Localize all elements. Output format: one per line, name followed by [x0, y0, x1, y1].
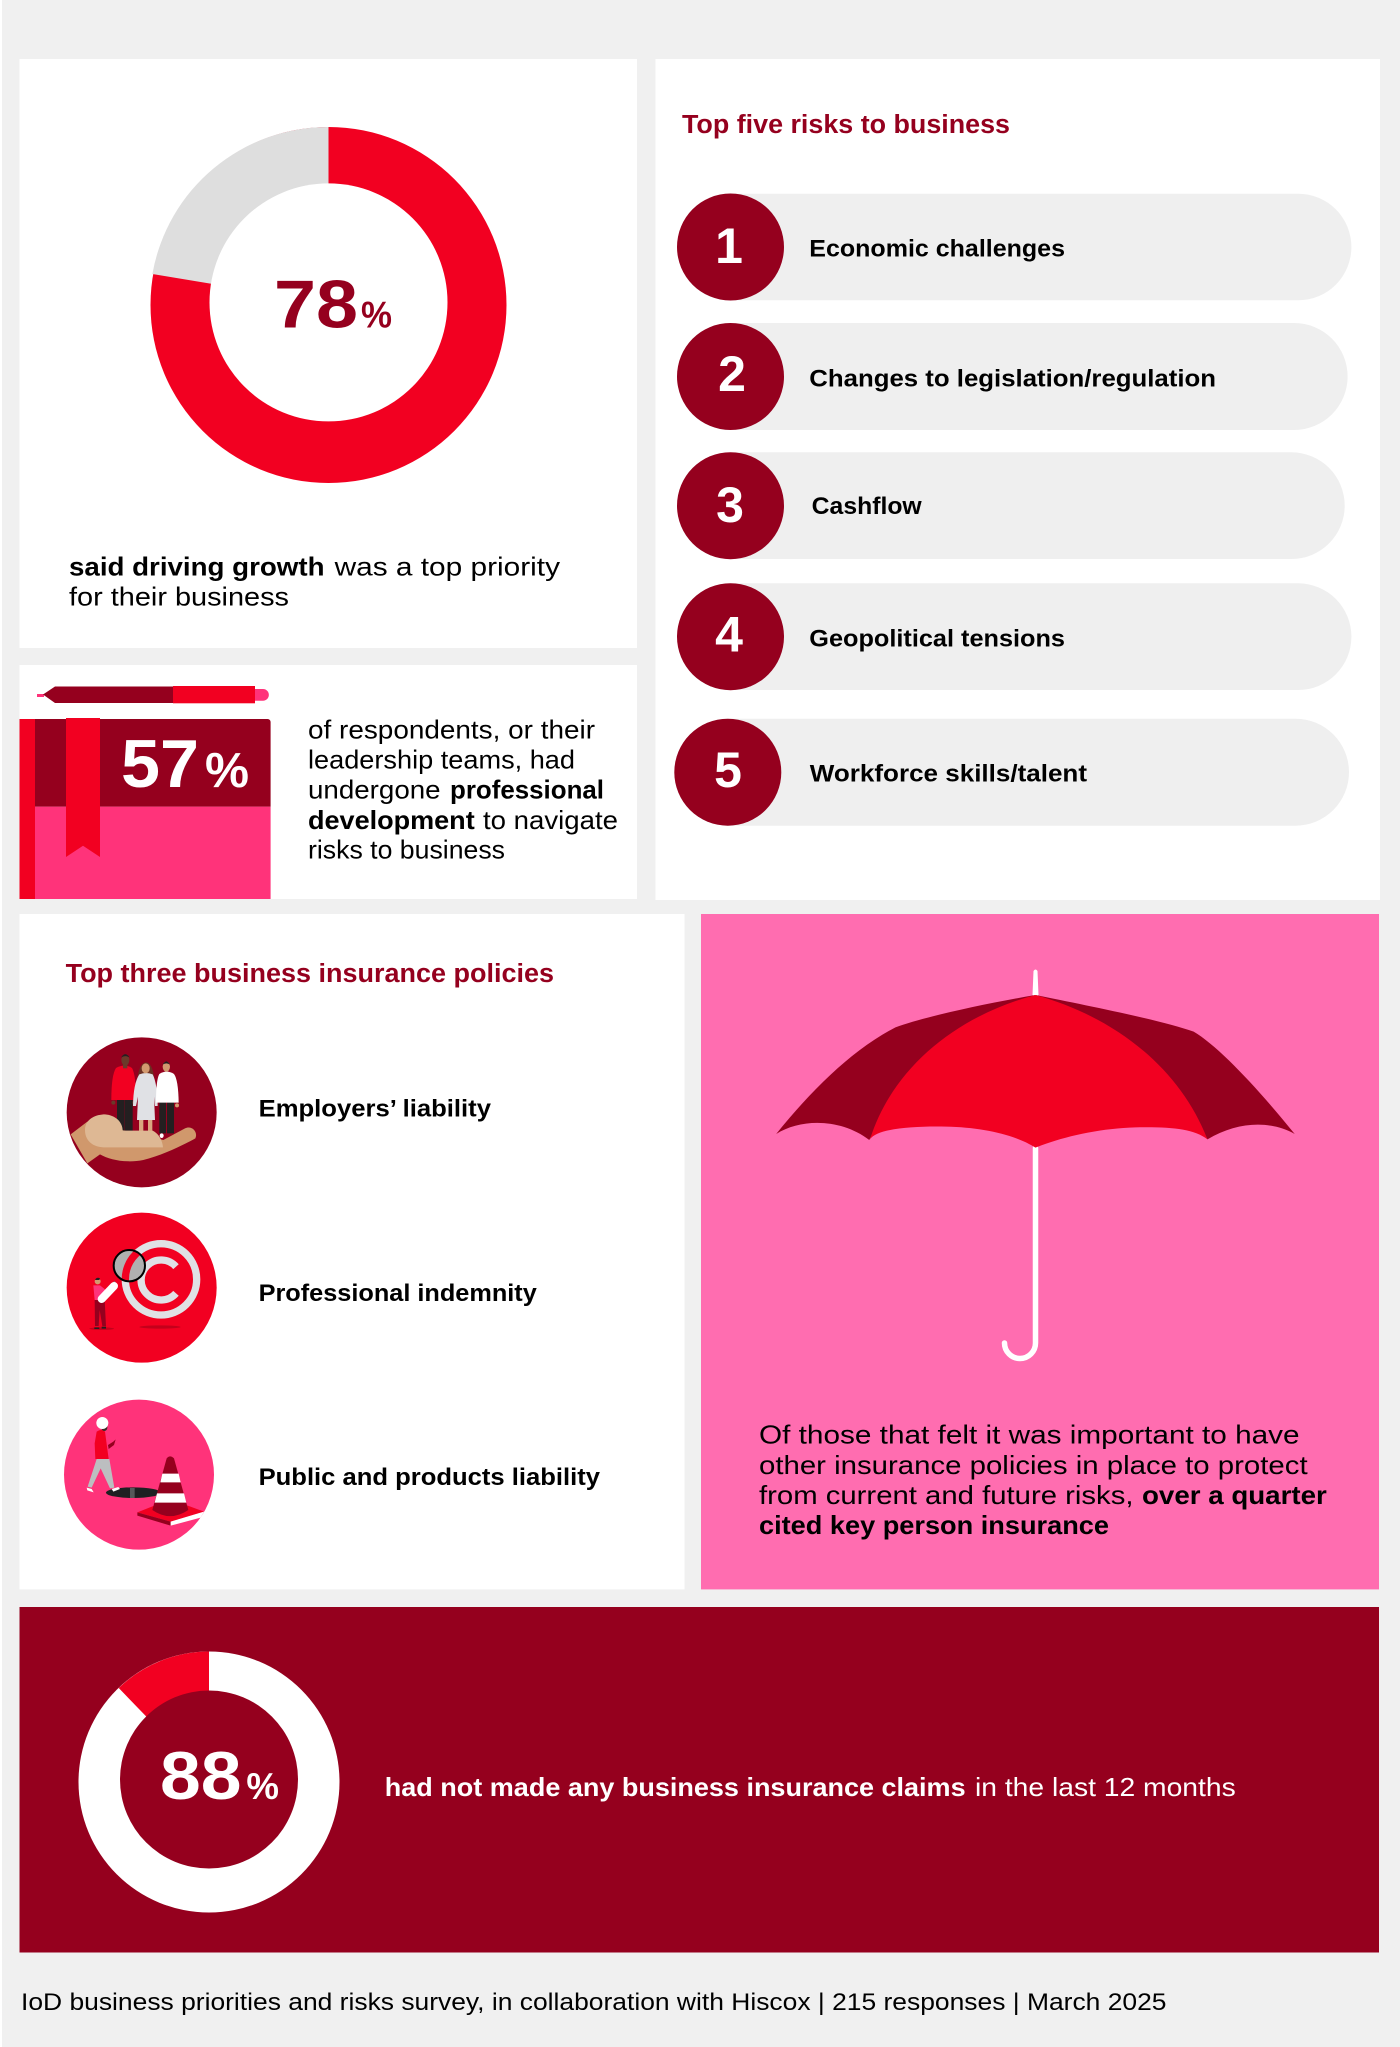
donut chart: 88%: [78, 1652, 340, 1912]
footer: source: IoD business priorities and risks survey, in collaboration with Hiscox | 215 responses | March 2025: [21, 1989, 1166, 2016]
label: public and products liability: Public and products liability: [259, 1464, 600, 1491]
panel: driving growth: [20, 59, 637, 648]
text: driving growth: for their business: [69, 581, 289, 611]
text: insurance claims: in the last 12 months: [975, 1772, 1236, 1802]
text: professional development: to navigate: [483, 805, 618, 835]
risk 3: [677, 452, 1345, 559]
stat: 78%: [274, 266, 392, 342]
risk 1: [677, 194, 1351, 300]
text: insurance claims: had not made any business insurance claims: [385, 1772, 966, 1802]
text: driving growth: said driving growth: [69, 551, 324, 581]
text: insurance claims: [385, 1772, 1236, 1802]
risk 5: [674, 719, 1349, 826]
risk 5: Workforce skills/talent: [810, 761, 1087, 788]
icon: public and products liability: [64, 1400, 214, 1550]
text: professional development: professional: [450, 775, 604, 805]
icon: professional indemnity: [67, 1213, 217, 1363]
text: key person insurance: over a quarter: [1142, 1480, 1327, 1510]
panel: key person insurance: [701, 914, 1379, 1589]
risk 4: Geopolitical tensions: [809, 626, 1065, 653]
text: professional development: of respondents, or their: [308, 715, 595, 745]
panel: top five risks: [656, 59, 1380, 900]
text: professional development: development: [308, 805, 475, 835]
risk 2: 2: [718, 346, 746, 402]
stat: 78%: 78: [274, 266, 358, 342]
donut chart: 78%: [150, 127, 506, 483]
icon: book: [20, 718, 271, 899]
text: key person insurance: Of those that felt it was important to have: [759, 1420, 1300, 1450]
panel: insurance claims: [20, 1607, 1379, 1952]
icon: employers' liability: [67, 1037, 217, 1187]
text: key person insurance: cited key person insurance: [759, 1510, 1109, 1540]
text: professional development: leadership teams, had: [308, 744, 575, 774]
heading: top three policies: Top three business insurance policies: [66, 960, 554, 988]
text: key person insurance: [759, 1420, 1327, 1540]
label: professional indemnity: Professional indemnity: [259, 1280, 537, 1307]
heading: top five risks: Top five risks to business: [682, 111, 1010, 139]
stat: 57%: 57: [121, 726, 199, 802]
risk 2: [677, 323, 1348, 430]
text: key person insurance: other insurance policies in place to protect: [759, 1450, 1308, 1480]
icon: umbrella: [776, 970, 1295, 1358]
stat: 57%: [121, 726, 249, 802]
text: driving growth: was a top priority: [333, 551, 560, 581]
risk 4: 4: [715, 607, 743, 663]
label: employers' liability: Employers’ liability: [259, 1096, 491, 1123]
text: driving growth: [69, 551, 560, 611]
risk 1: Economic challenges: [809, 236, 1065, 263]
risk 3: Cashflow: [812, 493, 923, 520]
risk 1: 1: [715, 218, 743, 274]
risk 5: 5: [714, 742, 742, 798]
panel: top three insurance policies: [20, 914, 684, 1589]
stat: 88%: [160, 1738, 279, 1814]
text: professional development: [308, 715, 618, 865]
panel: professional development: [20, 665, 637, 899]
text: professional development: risks to business: [308, 835, 505, 865]
stat: 88%: 88: [160, 1738, 242, 1814]
risk 2: Changes to legislation/regulation: [809, 366, 1216, 393]
stat: 88%: %: [246, 1766, 279, 1807]
stat: 78%: %: [361, 294, 392, 336]
stat: 57%: %: [205, 744, 249, 798]
text: professional development: undergone: [308, 775, 441, 805]
icon: pen: [37, 686, 269, 703]
risk 4: [677, 583, 1351, 690]
text: key person insurance: from current and future risks,: [759, 1480, 1134, 1510]
risk 3: 3: [716, 477, 744, 533]
